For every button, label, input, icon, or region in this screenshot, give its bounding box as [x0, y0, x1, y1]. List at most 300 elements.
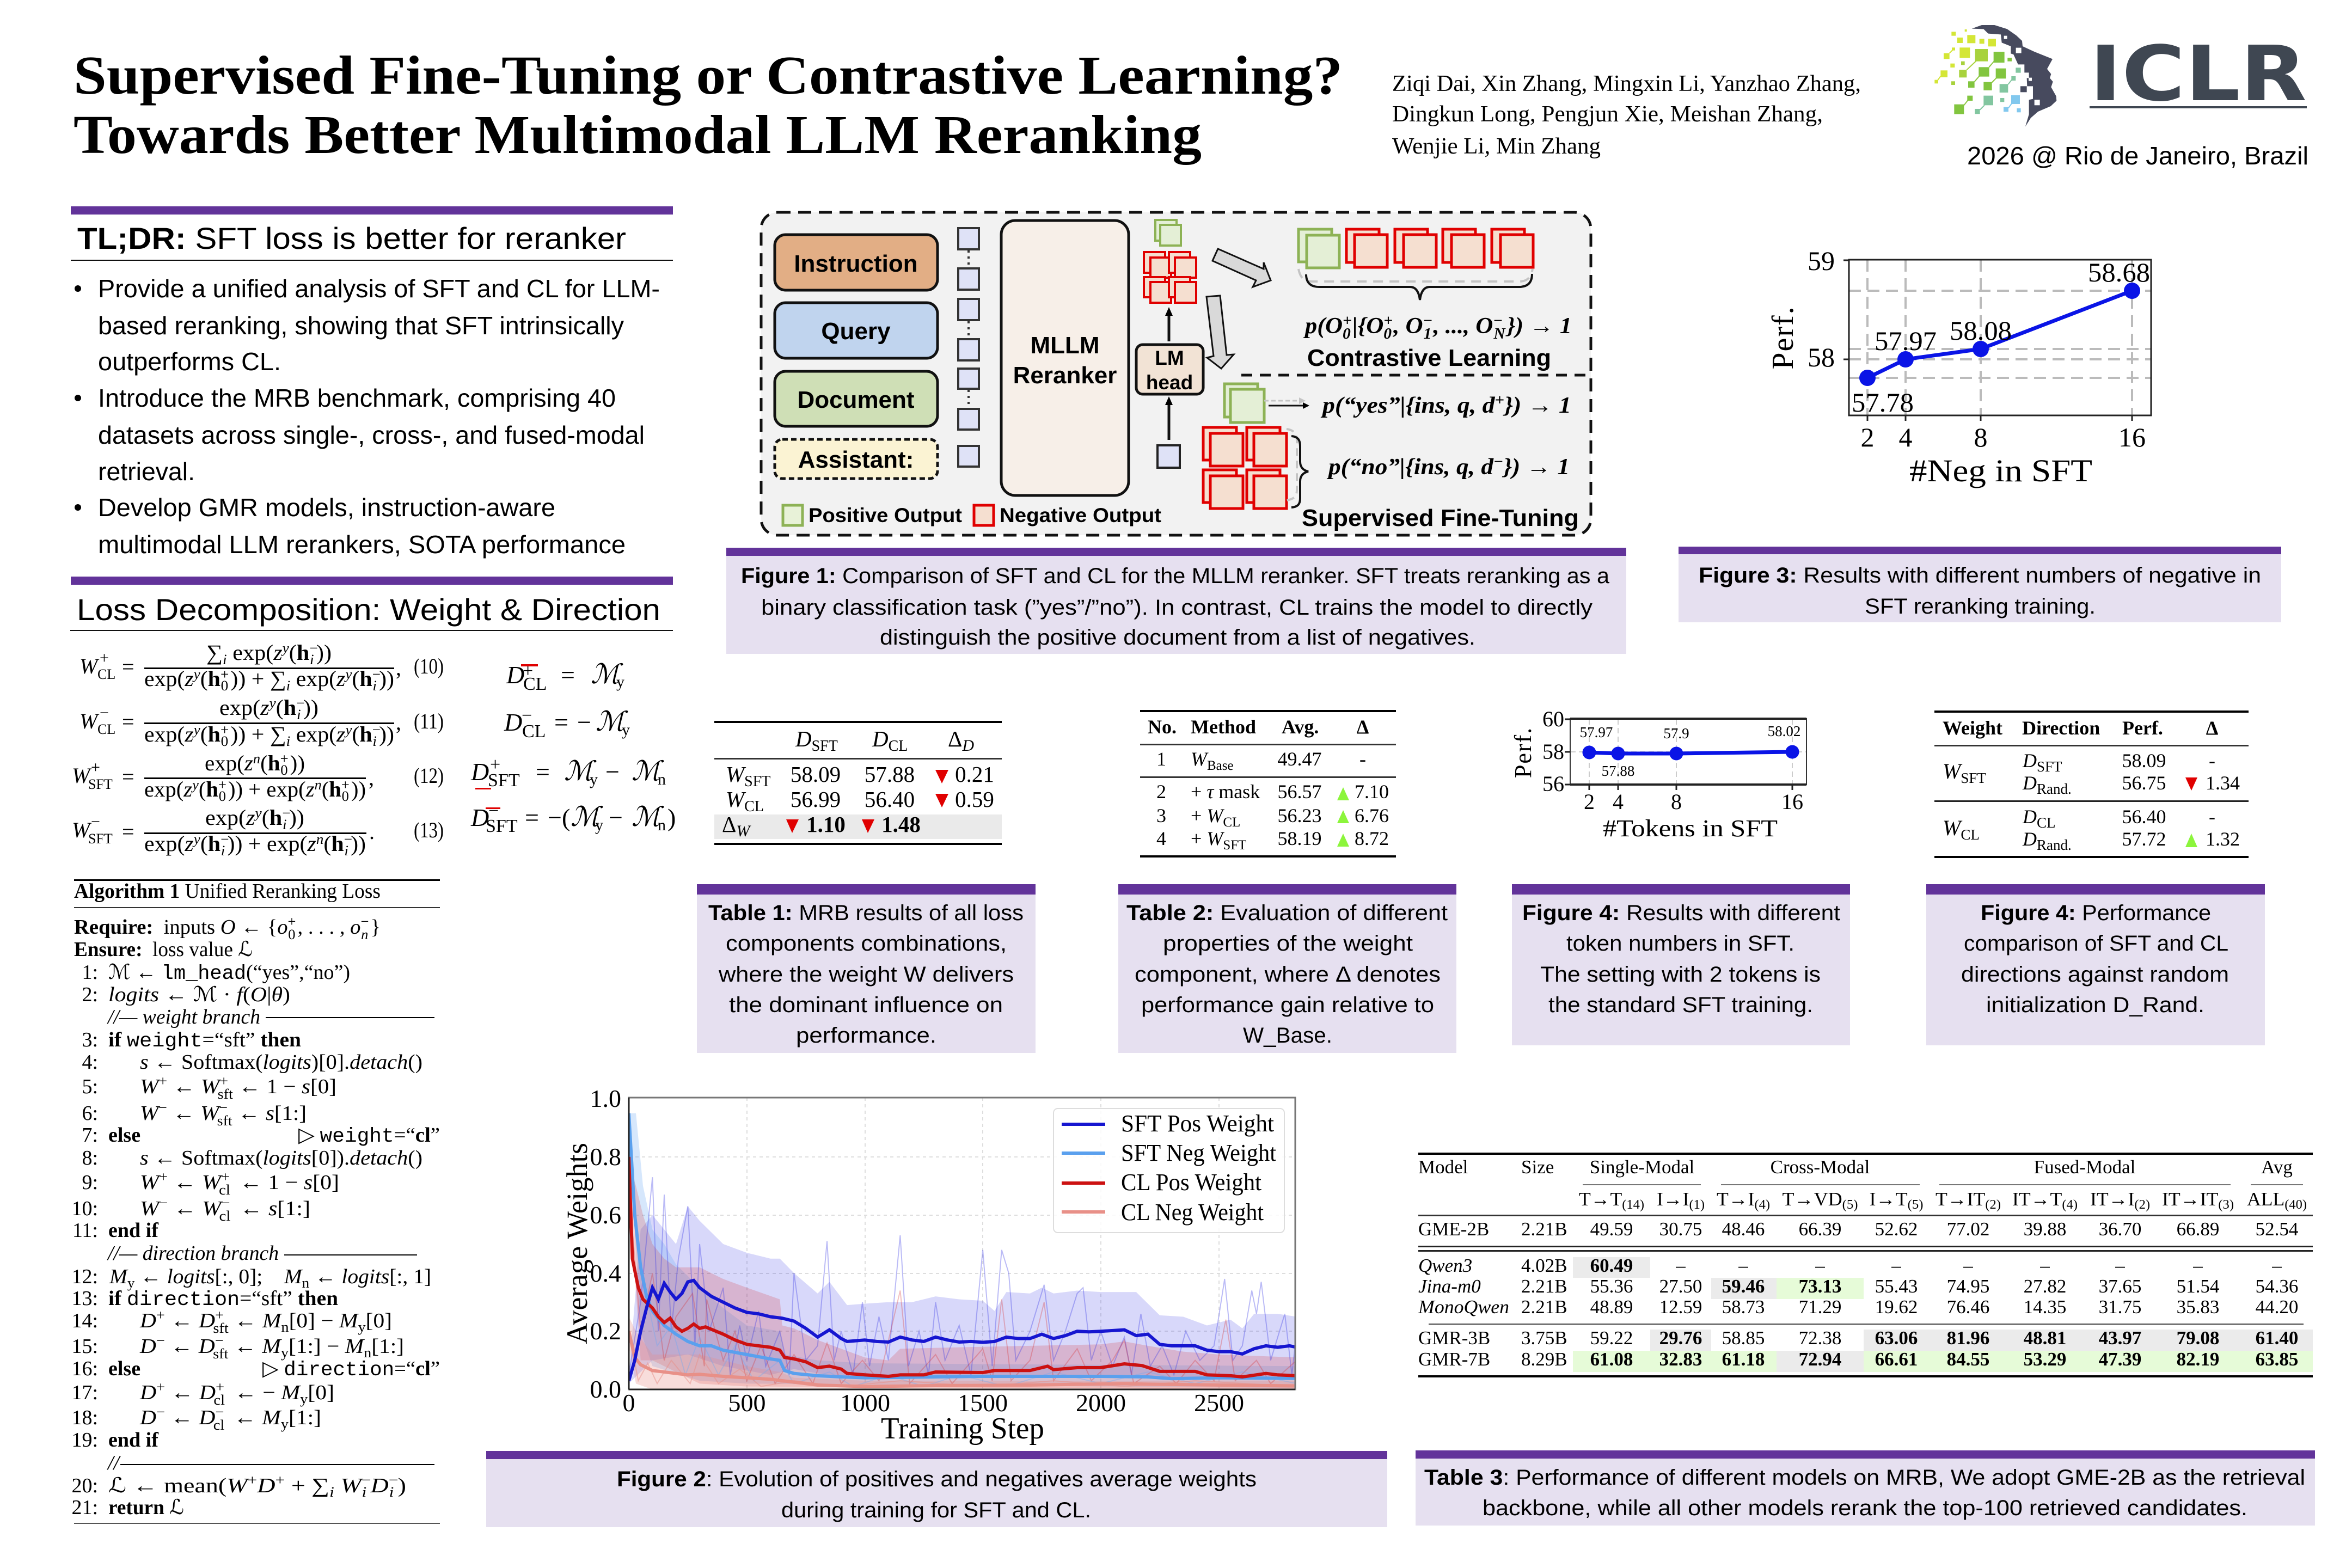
chart legend: CL Pos Weight	[1121, 1169, 1261, 1196]
equation 10: (	[352, 666, 359, 691]
chart: figure 3 negatives: 57.97	[1875, 326, 1937, 356]
caption: table 3: Table 3: Performance of different models on MRB, We adopt GME-2B as the retrieval	[1424, 1466, 2305, 1490]
axes	[629, 1098, 1295, 1389]
equation 11: W	[79, 709, 100, 733]
algorithm 1: W	[200, 1102, 221, 1125]
header rows: I→I	[1657, 1189, 1688, 1210]
table 2: W	[1191, 748, 1209, 770]
algorithm 1: Algorithm 1 Unified Reranking Loss	[74, 880, 381, 903]
equation 10: exp(	[290, 666, 336, 691]
equation: D plus SFT: +	[490, 755, 500, 775]
legend: Negative Output	[1000, 504, 1161, 526]
equation 10: y	[280, 640, 289, 656]
algorithm 1: n	[364, 1345, 371, 1361]
header rows: (5)	[1908, 1198, 1923, 1212]
algorithm 1: ←	[165, 1381, 199, 1404]
authors: Wenjie Li, Min Zhang	[1392, 134, 1601, 159]
algorithm 1: 10:	[71, 1197, 98, 1220]
chart: figure 3 negatives	[1766, 246, 2151, 488]
row GMR-7B: 66.61	[1875, 1349, 1918, 1370]
bullet list: datasets across single-, cross-, and fused-modal	[98, 421, 645, 449]
box: Query: Query	[821, 318, 891, 345]
equation: D minus CL: ℳ	[596, 706, 628, 737]
bullet list: multimodal LLM rerankers, SOTA performance	[98, 530, 626, 559]
table 2: 56.57	[1277, 781, 1322, 803]
table 2: -	[1359, 748, 1366, 770]
algorithm 1: s[0]	[304, 1171, 336, 1194]
algorithm 1: 12:	[71, 1265, 98, 1288]
table 4: 1.32	[2206, 828, 2240, 850]
algorithm 1: }	[370, 916, 381, 939]
equation: D plus CL: ℳ	[591, 659, 623, 689]
algorithm 1: + ∑	[285, 1474, 329, 1497]
box: Document	[775, 371, 938, 426]
header rows: I→T	[1870, 1189, 1907, 1210]
algorithm 1: [0]	[366, 1309, 392, 1332]
equation 12: ))	[290, 751, 305, 775]
equation: D minus CL: CL	[522, 721, 546, 742]
row GME-2B: 49.59	[1590, 1218, 1633, 1240]
chart: figure 4 tokens: 56	[1542, 771, 1564, 796]
algorithm 1: ▷ weight=“cl”	[298, 1124, 440, 1148]
row GME-2B: 66.39	[1799, 1218, 1841, 1240]
y tick labels	[590, 1085, 621, 1403]
equation 13: .	[369, 819, 375, 844]
box: Assistant	[775, 439, 938, 479]
algorithm 1: s ← Softmax( logits)[0].detach()	[140, 1051, 422, 1074]
equation 10: W	[79, 654, 100, 678]
equation 12: ,	[369, 765, 374, 790]
table 4: 56.40	[2122, 806, 2166, 828]
algorithm 1: +	[215, 1307, 224, 1323]
CL formula: }) → 1	[1505, 314, 1572, 339]
algorithm 1: W	[140, 1102, 161, 1125]
equation: D plus SFT: y	[590, 770, 598, 788]
row GMR-7B: 61.18	[1722, 1349, 1765, 1370]
table 2: 4	[1156, 828, 1166, 849]
algorithm 1: sft	[213, 1346, 229, 1362]
header rows: (3)	[2218, 1198, 2234, 1212]
algorithm 1: 17:	[71, 1381, 98, 1404]
row MonoQwen: 76.46	[1947, 1296, 1989, 1318]
row GMR-3B: 3.75B	[1521, 1327, 1567, 1349]
box: Instruction: Instruction	[794, 250, 918, 277]
chart: figure 4 tokens: 57.9	[1663, 725, 1689, 742]
caption: table 3	[1416, 1450, 2315, 1526]
CL formula: 0	[1343, 326, 1351, 342]
bullet list: based reranking, showing that SFT intrinsically	[98, 311, 624, 340]
series	[629, 1113, 1297, 1389]
table 1: D	[872, 726, 889, 751]
equation 12: exp(z	[205, 751, 253, 775]
equation 12: +	[280, 751, 289, 767]
algorithm 1: end if	[108, 1219, 159, 1242]
table 4: Weight	[1943, 717, 2002, 739]
algorithm 1: i	[362, 1484, 366, 1500]
equation 13: =	[122, 819, 134, 844]
y tick labels: 0.6	[590, 1201, 621, 1229]
equation: D minus SFT: −	[488, 801, 499, 821]
algorithm 1: cl	[219, 1208, 230, 1224]
caption: figure 3: Figure 3: Results with different numbers of negative in	[1699, 564, 2261, 587]
header rows: ALL	[2247, 1189, 2284, 1210]
equation: D plus SFT: −	[605, 758, 620, 786]
equation: D minus SFT: ℳ	[571, 801, 603, 832]
SFT yes formula: +	[1495, 392, 1504, 409]
row GME-2B: 30.75	[1659, 1218, 1702, 1240]
equation 12: W	[72, 763, 92, 788]
table 1: 1.10	[806, 812, 846, 837]
equation 11: (	[352, 722, 359, 746]
algorithm 1: −	[221, 1195, 230, 1211]
row GMR-7B: GMR-7B	[1418, 1349, 1490, 1370]
equation 13: (	[200, 831, 208, 856]
equation 11: (	[200, 722, 208, 746]
x tick labels	[623, 1389, 1244, 1417]
header rows	[1418, 1156, 2307, 1212]
header rows: Size	[1521, 1156, 1554, 1178]
table 4: CL	[2037, 814, 2056, 831]
chart: figure 3 negatives: 16	[2118, 422, 2146, 452]
row GMR-3B: 48.81	[2024, 1327, 2066, 1349]
equation: D minus CL	[504, 706, 630, 742]
row GMR-7B	[1418, 1349, 2298, 1370]
table 1: 58.09	[791, 762, 841, 787]
caption: figure 2	[486, 1451, 1387, 1527]
equation 11: ))	[379, 722, 394, 746]
x tick labels: 1500	[958, 1389, 1008, 1417]
algorithm 1: +	[221, 1169, 230, 1185]
row Jina-m0: 51.54	[2177, 1276, 2219, 1297]
chart: figure 2 weights: Average Weights	[561, 1143, 593, 1344]
box: Instruction	[775, 235, 938, 290]
brace under CL outputs	[1298, 269, 1533, 300]
title: Supervised Fine-Tuning or Contrastive Learning?	[74, 45, 1343, 106]
chart: figure 4 tokens: 16	[1781, 789, 1803, 814]
table 4: D	[2022, 806, 2037, 828]
caption: figure 1: distinguish the positive document from a list of negatives.	[880, 626, 1475, 650]
equation 12: 0	[219, 788, 226, 804]
equation 12: h	[268, 751, 280, 775]
table 2: SFT	[1223, 838, 1246, 853]
caption: table 1: components combinations,	[726, 932, 1007, 955]
title: Towards Better Multimodal LLM Reranking	[74, 104, 1202, 165]
chart: figure 2 weights	[561, 1085, 1297, 1445]
algorithm 1: W	[140, 1075, 161, 1098]
algorithm 1: 20:	[71, 1474, 98, 1497]
chart: figure 4 tokens: 57.88	[1602, 763, 1634, 779]
equation 13: −	[282, 805, 291, 821]
equation 10: ,	[396, 656, 401, 680]
SFT yes formula: }) → 1	[1503, 393, 1571, 418]
caption: table 1: the dominant influence on	[729, 993, 1003, 1017]
header rows: (1)	[1689, 1198, 1705, 1212]
equation 12: (	[199, 777, 206, 801]
header rows: Model	[1418, 1156, 1468, 1178]
algorithm 1: //	[107, 1451, 121, 1474]
algorithm 1: else	[108, 1124, 140, 1147]
SFT yes formula: p(“yes”|{ins, q, d	[1322, 393, 1480, 418]
row Jina-m0: 54.36	[2256, 1276, 2298, 1297]
row GMR-7B: 72.94	[1799, 1349, 1841, 1370]
algorithm 1: +	[219, 1073, 228, 1089]
algorithm 1: ←	[229, 1309, 262, 1332]
row GMR-7B: 82.19	[2177, 1349, 2219, 1370]
chart: figure 3 negatives: 59	[1808, 246, 1835, 276]
row Qwen3: Qwen3	[1418, 1255, 1472, 1276]
equation: D minus SFT: D	[470, 804, 489, 831]
row GMR-3B: 61.40	[2256, 1327, 2298, 1349]
equation 13: )) + exp(	[228, 831, 307, 856]
equation 10: i	[310, 652, 314, 667]
caption: figure 4 directions	[1926, 884, 2265, 1045]
caption: table 2: properties of the weight	[1163, 932, 1413, 955]
algorithm 1: +	[159, 1169, 168, 1185]
CL formula: 0	[1383, 326, 1392, 342]
algorithm 1: 8:	[82, 1147, 98, 1169]
table 1: 1.48	[881, 812, 921, 837]
chart: figure 4 tokens: Perf.	[1510, 727, 1536, 778]
algorithm 1: +	[288, 914, 296, 929]
SFT negative stacks and brace	[1203, 427, 1308, 509]
algorithm 1: M	[261, 1406, 282, 1429]
equation 10: +	[100, 649, 109, 667]
equation 12: +	[91, 758, 100, 776]
algorithm 1: +	[216, 1379, 224, 1395]
algorithm 1: W	[202, 1197, 223, 1220]
equation 10: h	[297, 640, 309, 665]
equation 13: h	[331, 831, 344, 856]
equation 10: CL	[97, 666, 115, 682]
CL formula: N	[1493, 326, 1506, 342]
row GME-2B	[1418, 1218, 2298, 1240]
table 4: D	[2022, 772, 2037, 794]
row MonoQwen: 19.62	[1875, 1296, 1918, 1318]
header rows: Fused-Modal	[2034, 1156, 2136, 1178]
row GMR-7B: 53.29	[2024, 1349, 2066, 1370]
algorithm 1: 5:	[82, 1075, 98, 1098]
algorithm 1: M	[261, 1335, 282, 1358]
table 3	[1418, 1153, 2313, 1377]
equation 13: (	[262, 805, 270, 830]
algorithm 1: return ℒ	[108, 1496, 184, 1519]
equation: D plus CL: +	[523, 661, 533, 681]
algorithm 1: s[0]	[302, 1075, 334, 1098]
table 4: SFT	[2037, 758, 2062, 775]
equation 13: i	[283, 817, 287, 832]
equation 10: (	[289, 640, 297, 665]
algorithm 1: [0]	[308, 1381, 334, 1404]
algorithm 1: 11:	[72, 1219, 98, 1242]
equation: D plus CL: D	[506, 661, 524, 689]
algorithm 1: [1:]	[289, 1406, 321, 1429]
header rows: (2)	[1985, 1198, 2001, 1212]
row MonoQwen: 31.75	[2099, 1296, 2141, 1318]
box: MLLM Reranker: Reranker	[1013, 362, 1117, 389]
header rows: T→IT	[1935, 1189, 1984, 1210]
algorithm 1: 0	[288, 927, 295, 942]
SFT no formula: −	[1493, 454, 1503, 470]
algorithm 1: y	[281, 1416, 289, 1432]
table 4: W	[1943, 759, 1963, 783]
algorithm 1: +	[275, 1472, 285, 1488]
equation 13: ))	[351, 831, 366, 856]
row GME-2B: 2.21B	[1521, 1218, 1567, 1240]
equation 11: i	[297, 707, 301, 722]
header rows: (5)	[1842, 1198, 1858, 1212]
table 1: Δ	[948, 726, 962, 751]
chart: figure 3 negatives: 58	[1808, 342, 1835, 372]
equation 11: ,	[396, 710, 401, 734]
caption: figure 1: binary classification task (”yes”/”no”). In contrast, CL trains the model to directly	[761, 596, 1592, 620]
row GMR-3B: 58.85	[1722, 1327, 1765, 1349]
equation: D minus SFT: n	[658, 816, 666, 834]
table 2: Method	[1191, 716, 1256, 738]
table 2: CL	[1223, 815, 1240, 830]
algorithm 1: −	[156, 1333, 165, 1349]
equation: D plus CL: y	[616, 673, 624, 691]
equation 10: (10)	[414, 654, 444, 678]
equation 13: W	[72, 818, 92, 842]
algorithm 1: ← 1 −	[234, 1171, 304, 1194]
table 4: Direction	[2022, 717, 2100, 739]
equation 11: (	[276, 695, 284, 720]
algorithm 1: ←	[232, 1102, 266, 1125]
equation 13: −	[220, 831, 229, 847]
equation 12: n	[253, 751, 260, 767]
equation 10: exp(z	[144, 666, 193, 691]
row GMR-7B: 8.29B	[1521, 1349, 1567, 1370]
row Jina-m0: 73.13	[1799, 1276, 1841, 1297]
equation 10: z	[273, 640, 283, 665]
CL formula: |{O	[1352, 314, 1383, 339]
equation 13: exp(z	[144, 831, 193, 856]
chart: figure 4 tokens: 58	[1542, 739, 1564, 764]
arrow to CL	[1212, 249, 1271, 287]
header rows: (4)	[1754, 1198, 1770, 1212]
algorithm 1: W	[201, 1075, 222, 1098]
row GME-2B: GME-2B	[1418, 1218, 1489, 1240]
row GMR-3B: 59.22	[1590, 1327, 1633, 1349]
caption: table 2: Table 2: Evaluation of different	[1126, 901, 1448, 925]
row GMR-3B: 81.96	[1947, 1327, 1989, 1349]
table 4: Perf.	[2122, 717, 2163, 739]
chart: figure 3 negatives: 58.68	[2088, 257, 2150, 287]
algorithm 1: 9:	[82, 1171, 98, 1194]
row GMR-7B: 32.83	[1659, 1349, 1702, 1370]
table 2: 1	[1156, 748, 1166, 770]
caption: figure 3	[1679, 547, 2281, 622]
table 4: Rand.	[2037, 781, 2072, 797]
row MonoQwen: 14.35	[2024, 1296, 2066, 1318]
caption: figure 4 tokens: token numbers in SFT.	[1566, 932, 1794, 955]
algorithm 1: −	[156, 1404, 165, 1420]
table 4: D	[2022, 828, 2037, 850]
equation 11: ))	[303, 695, 318, 720]
authors: Dingkun Long, Pengjun Xie, Meishan Zhang,	[1392, 102, 1823, 127]
table 1: D	[795, 726, 812, 751]
equation 11: =	[122, 709, 134, 734]
equation 11: exp(z	[144, 722, 193, 746]
equation: D plus SFT	[470, 755, 666, 791]
cell highlights	[1573, 1257, 2313, 1372]
algorithm 1: s ← Softmax( logits[0]).detach()	[140, 1147, 422, 1169]
equation 12: (	[322, 777, 329, 801]
algorithm 1: sft	[213, 1320, 229, 1336]
row Jina-m0: 74.95	[1947, 1276, 1989, 1297]
equation 12: z	[305, 777, 315, 801]
row MonoQwen: 58.73	[1722, 1296, 1765, 1318]
caption: table 1: performance.	[796, 1024, 936, 1048]
table 1: CL	[889, 738, 908, 755]
SFT positive stack and arrow	[1224, 384, 1309, 422]
header rows: (4)	[2062, 1198, 2078, 1212]
algorithm 1: 4:	[82, 1051, 98, 1074]
equation 12	[72, 751, 444, 804]
equation 10: −	[309, 640, 318, 656]
equation 13: z	[307, 831, 316, 856]
row Qwen3	[1418, 1255, 2282, 1276]
caption: figure 4 tokens: The setting with 2 tokens is	[1540, 963, 1821, 987]
algorithm 1: 21:	[71, 1496, 98, 1519]
equation: D minus CL: −	[577, 708, 591, 736]
algorithm 1: D	[370, 1474, 389, 1497]
algorithm 1: D	[199, 1381, 216, 1404]
equation 13: h	[208, 831, 220, 856]
token squares	[958, 228, 979, 467]
algorithm 1: y	[127, 1275, 134, 1291]
label: Supervised Fine-Tuning: Supervised Fine-Tuning	[1302, 505, 1579, 531]
CL formula: 1	[1424, 326, 1431, 342]
table 2: 56.23	[1277, 805, 1322, 826]
algorithm 1: 19:	[71, 1429, 98, 1451]
row Qwen3: –	[2039, 1255, 2050, 1276]
SFT no formula: p(“no”|{ins, q, d	[1328, 455, 1481, 480]
algorithm 1: ←	[165, 1335, 199, 1358]
algorithm 1: [1:] −	[289, 1335, 345, 1358]
equation 13: n	[316, 831, 323, 847]
equation 10: )) + ∑	[230, 666, 286, 691]
caption: figure 1: Figure 1: Comparison of SFT and CL for the MLLM reranker. SFT treats reranking as a	[741, 564, 1610, 588]
row Qwen3: –	[1675, 1255, 1686, 1276]
row GMR-3B: 63.06	[1875, 1327, 1918, 1349]
row Jina-m0: 59.46	[1722, 1276, 1765, 1297]
algorithm 1: 1:	[82, 961, 98, 984]
equation: D minus SFT: ℳ	[632, 801, 664, 832]
row GMR-3B: 43.97	[2099, 1327, 2141, 1349]
row Jina-m0: 2.21B	[1521, 1276, 1567, 1297]
table 1: CL	[744, 798, 764, 815]
equation 12: n	[315, 777, 322, 793]
row GMR-7B: 61.08	[1590, 1349, 1633, 1370]
algorithm 1: n	[302, 1275, 309, 1291]
table 4: 58.09	[2122, 750, 2166, 771]
chart: figure 4 tokens	[1510, 707, 1806, 842]
chart: figure 4 tokens: 2	[1584, 789, 1595, 814]
y tick labels: 0.2	[590, 1317, 621, 1345]
equation 13	[72, 805, 444, 859]
equation: D minus SFT	[470, 801, 676, 836]
box: MLLM Reranker: MLLM	[1030, 332, 1100, 359]
row Qwen3: –	[2115, 1255, 2125, 1276]
algorithm 1: 2:	[82, 983, 98, 1006]
equation 10: +	[220, 666, 229, 682]
algorithm 1: y	[358, 1319, 366, 1335]
algorithm 1: M	[339, 1309, 359, 1332]
algorithm 1: 14:	[71, 1309, 98, 1332]
equation: D minus SFT: −	[609, 804, 623, 831]
table 4: W	[1943, 816, 1963, 840]
